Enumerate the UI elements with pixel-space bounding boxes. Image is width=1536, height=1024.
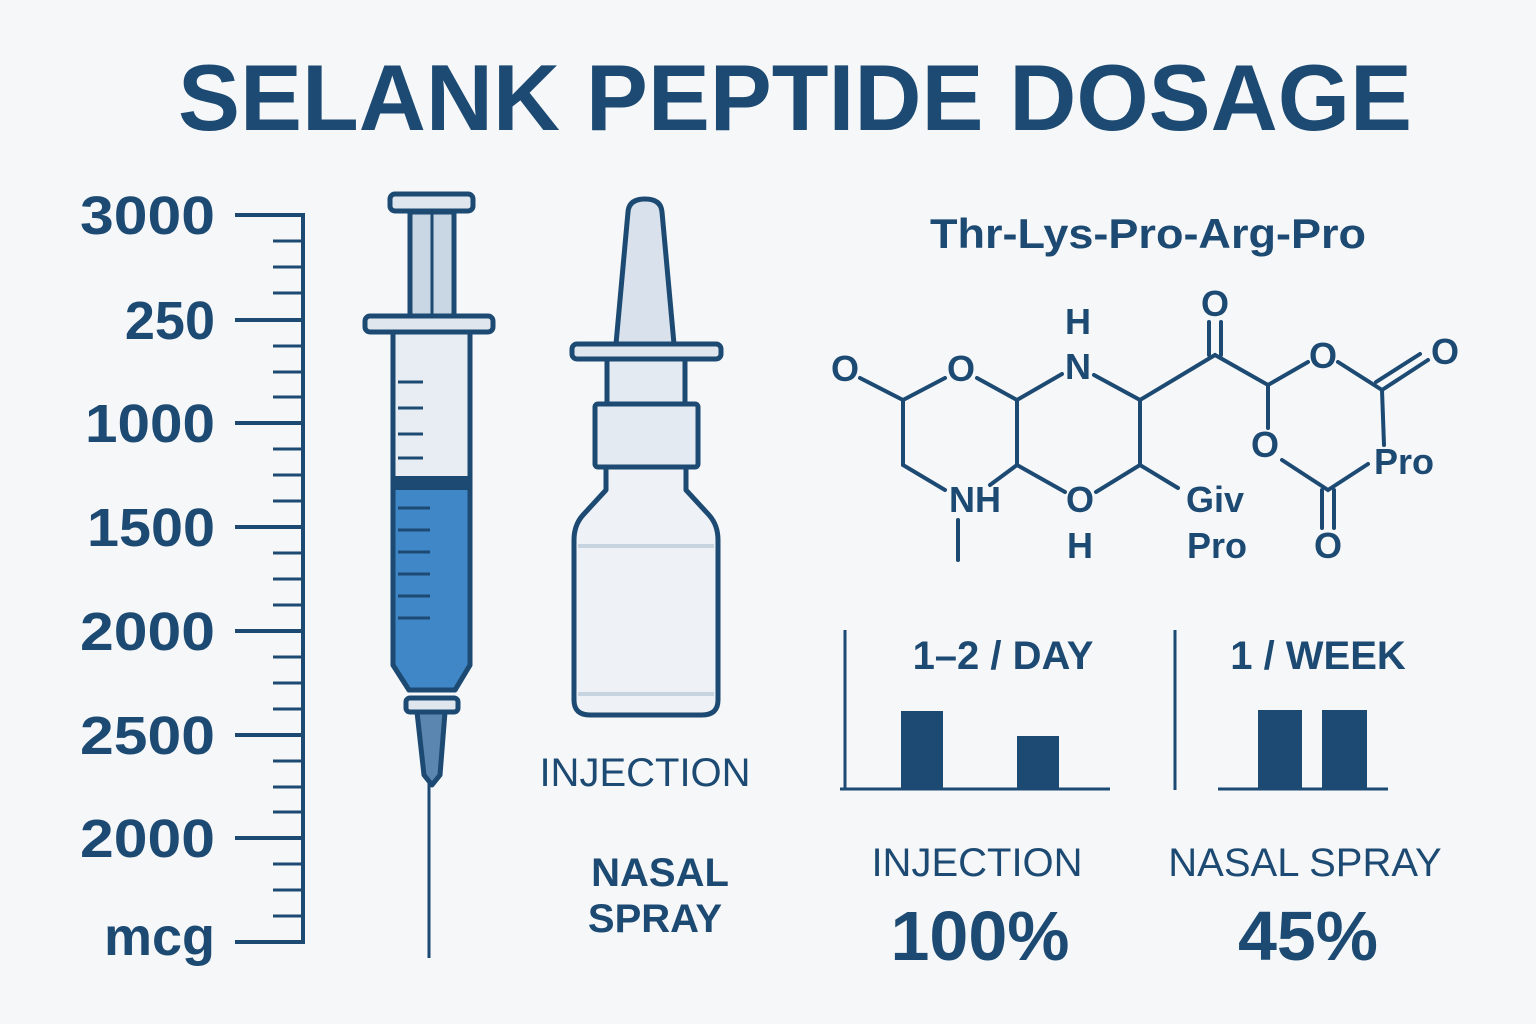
bar chart: 1 / week: 1 / WEEK bbox=[1230, 634, 1406, 678]
dosage scale: 1500 bbox=[87, 498, 215, 558]
molecule structure: O bbox=[1251, 424, 1279, 465]
title: SELANK PEPTIDE DOSAGE bbox=[178, 45, 1412, 150]
bar chart: 1-2 / day bbox=[840, 630, 1110, 790]
molecule structure: H bbox=[1065, 301, 1091, 342]
molecule structure: O bbox=[1309, 335, 1337, 376]
molecule structure bbox=[831, 283, 1459, 566]
molecule structure: O bbox=[1066, 479, 1094, 520]
stat: nasal spray 45%: 45% bbox=[1238, 897, 1378, 975]
molecule structure: O bbox=[1201, 283, 1229, 324]
stat: injection 100% bbox=[871, 841, 1083, 975]
dosage scale: 1000 bbox=[85, 394, 215, 454]
dosage scale bbox=[80, 186, 303, 967]
bar chart: 1 / week bbox=[1175, 630, 1406, 790]
label: injection (icon): INJECTION bbox=[539, 751, 751, 795]
molecule structure: Giv bbox=[1186, 479, 1244, 520]
molecule structure: O bbox=[947, 348, 975, 389]
molecule structure: NH bbox=[949, 479, 1001, 520]
dosage scale: 250 bbox=[125, 291, 215, 351]
molecule structure: O bbox=[1431, 331, 1459, 372]
stat: injection 100%: INJECTION bbox=[871, 841, 1083, 885]
icon: nasal spray bottle bbox=[572, 199, 721, 715]
stat: injection 100%: 100% bbox=[890, 897, 1070, 975]
stat: nasal spray 45%: NASAL SPRAY bbox=[1168, 841, 1442, 885]
dosage scale: mcg bbox=[104, 907, 215, 967]
icon: syringe bbox=[365, 194, 493, 958]
peptide sequence: Thr-Lys-Pro-Arg-Pro bbox=[930, 210, 1366, 257]
dosage scale: 2000 bbox=[80, 809, 215, 869]
label: nasal spray (icon): NASAL bbox=[591, 851, 729, 895]
dosage scale: 2000 bbox=[80, 602, 215, 662]
bar chart: 1-2 / day: 1–2 / DAY bbox=[913, 634, 1094, 678]
dosage scale: 3000 bbox=[80, 186, 215, 246]
dosage scale: 2500 bbox=[80, 706, 215, 766]
molecule structure: Pro bbox=[1374, 441, 1434, 482]
molecule structure: Pro bbox=[1187, 525, 1247, 566]
label: nasal spray (icon) bbox=[588, 851, 729, 941]
molecule structure: O bbox=[831, 348, 859, 389]
molecule structure: N bbox=[1065, 346, 1091, 387]
stat: nasal spray 45% bbox=[1168, 841, 1442, 975]
label: nasal spray (icon): SPRAY bbox=[588, 897, 722, 941]
molecule structure: H bbox=[1067, 525, 1093, 566]
molecule structure: O bbox=[1314, 525, 1342, 566]
